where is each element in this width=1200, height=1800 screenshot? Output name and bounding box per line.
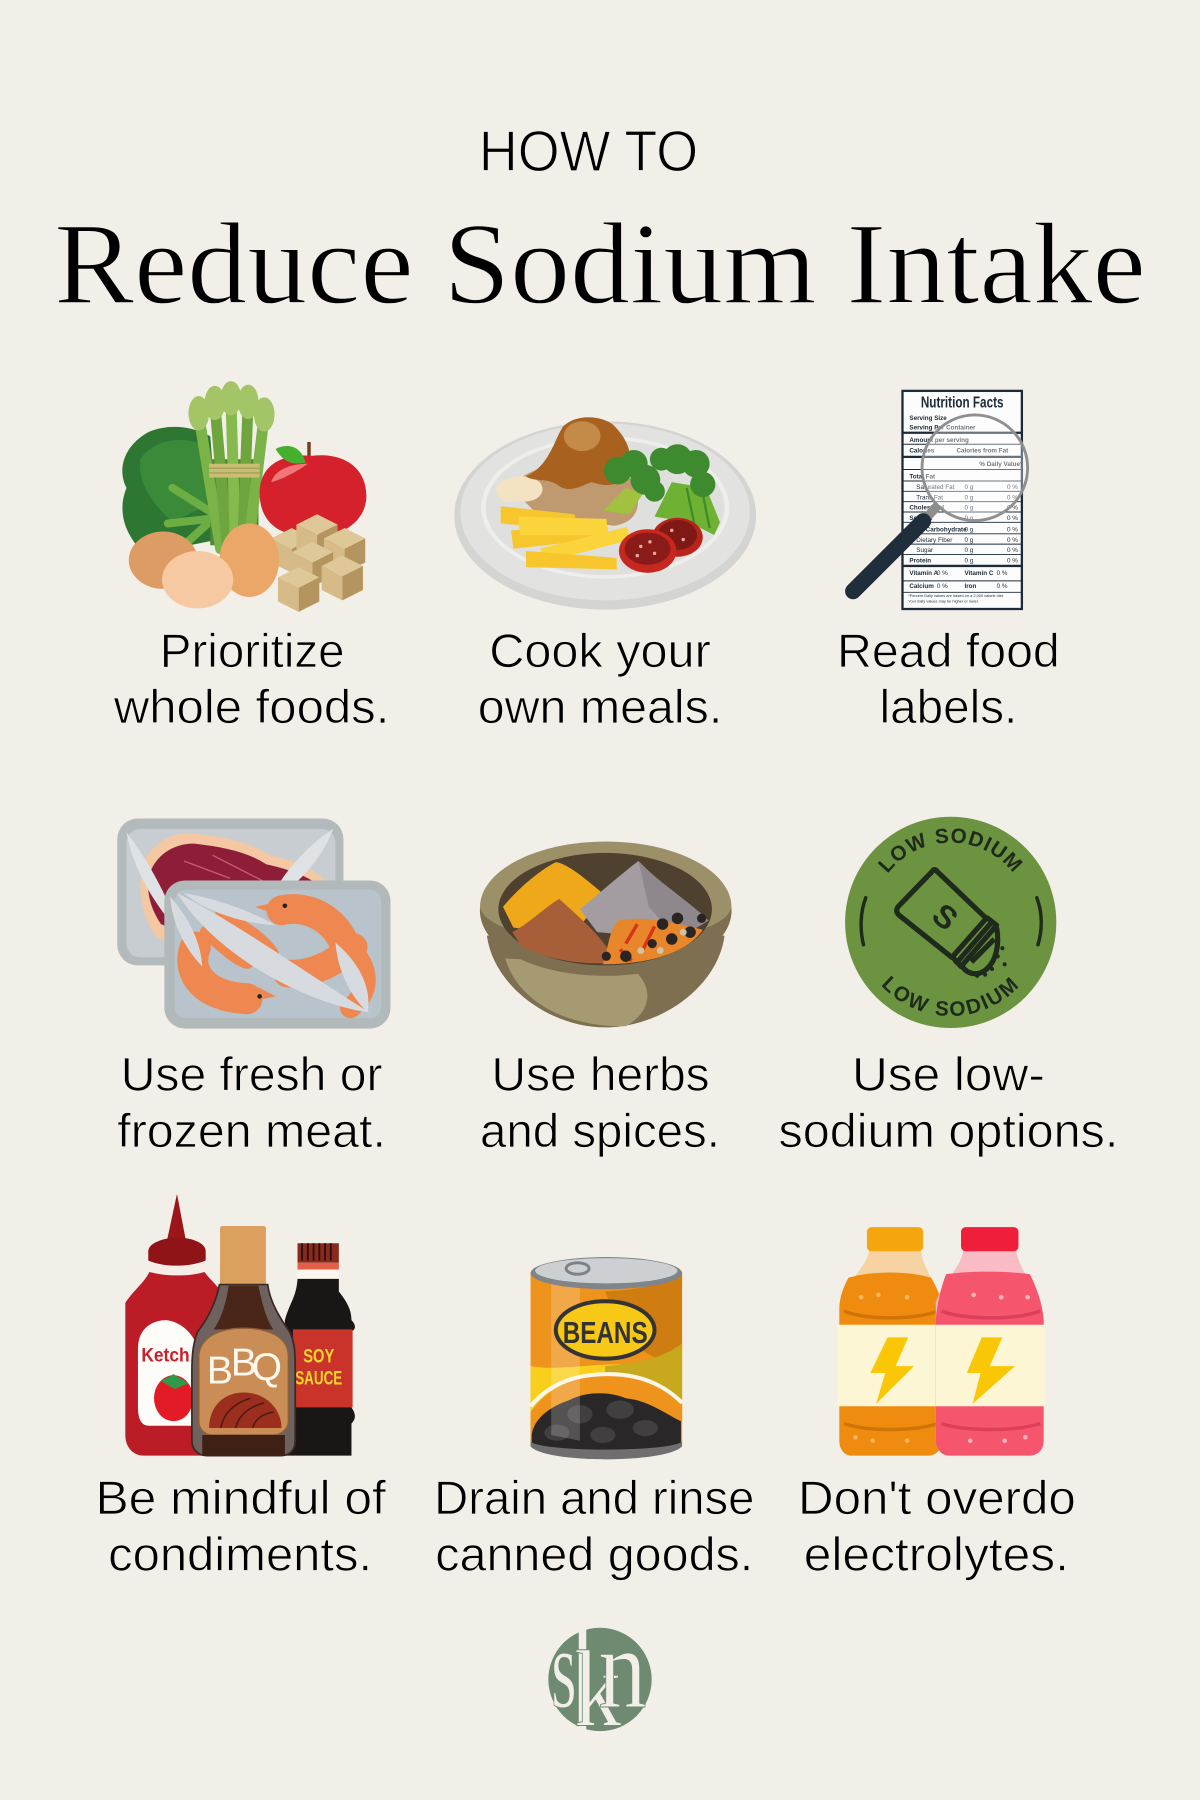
caption: use fresh or frozen meat — [117, 1048, 386, 1157]
icon: low sodium badge — [845, 816, 1056, 1028]
heading: reduce sodium intake: Reduce Sodium Intake — [54, 200, 1146, 329]
icon: nutrition facts label with magnifier: Calcium — [909, 583, 934, 590]
icon: nutrition facts label with magnifier: 0 % — [937, 583, 948, 590]
icon: can of beans: BEANS — [563, 1315, 648, 1350]
icon: nutrition facts label with magnifier: Total Fat — [909, 474, 936, 481]
icon: nutrition facts label with magnifier: 0 g — [964, 494, 974, 501]
icon: nutrition facts label with magnifier: Total Carbohydrate — [909, 527, 967, 534]
panel: drain and rinse canned goods — [434, 1257, 754, 1580]
icon: nutrition facts label with magnifier: 0 % — [1007, 547, 1018, 554]
icon: nutrition facts label with magnifier: Calories — [909, 447, 935, 454]
caption: drain and rinse canned goods: canned goods. — [435, 1527, 753, 1580]
caption: use low-sodium options — [779, 1048, 1118, 1157]
caption: use herbs and spices — [480, 1048, 720, 1157]
caption: use herbs and spices: and spices. — [480, 1104, 720, 1157]
logo: skn monogram: k — [574, 1628, 622, 1749]
caption: read food labels — [837, 624, 1060, 733]
caption: read food labels: labels. — [880, 680, 1017, 733]
caption: be mindful of condiments: condiments. — [108, 1527, 372, 1580]
caption: cook your own meals — [478, 624, 722, 733]
caption: prioritize whole foods: Prioritize — [160, 624, 345, 677]
right bottle — [936, 1227, 1045, 1456]
icon: nutrition facts label with magnifier: Protein — [909, 557, 931, 564]
heading: how to: HOW TO — [479, 120, 698, 184]
logo: skn monogram — [548, 1605, 652, 1749]
icon: condiment bottles: SOY — [303, 1346, 334, 1368]
icon: condiment bottles: SAUCE — [295, 1367, 342, 1389]
icon: nutrition facts label with magnifier: 0 % — [1007, 484, 1018, 491]
caption: be mindful of condiments — [95, 1471, 387, 1580]
icon: nutrition facts label with magnifier: Trans Fat — [916, 494, 943, 501]
icon: nutrition facts label with magnifier: 0 g — [964, 547, 974, 554]
icon: condiment bottles: B — [207, 1349, 233, 1392]
icon: nutrition facts label with magnifier: Amount per serving — [909, 437, 969, 444]
icon: electrolyte drink bottles — [837, 1227, 1045, 1456]
icon: nutrition facts label with magnifier: 0 % — [997, 570, 1008, 577]
caption: use low-sodium options: Use low- — [852, 1048, 1045, 1101]
icon: low sodium badge: LOW SODIUM — [878, 828, 1023, 873]
icon: nutrition facts label with magnifier: Vitamin A — [909, 570, 939, 577]
panel: use herbs and spices — [480, 841, 732, 1157]
icon: whole foods — [122, 381, 366, 612]
caption: cook your own meals: own meals. — [478, 680, 722, 733]
icon: nutrition facts label with magnifier: Sodium — [909, 515, 933, 522]
icon: condiment bottles — [125, 1194, 355, 1456]
icon: packaged meat and shrimp trays — [117, 818, 390, 1029]
icon: nutrition facts label with magnifier: 0 % — [1007, 505, 1018, 512]
icon: nutrition facts label with magnifier — [853, 391, 1028, 609]
logo: skn monogram: s — [551, 1605, 576, 1732]
caption: prioritize whole foods: whole foods. — [113, 680, 389, 733]
caption: cook your own meals: Cook your — [489, 624, 711, 677]
caption: don't overdo electrolytes — [798, 1471, 1076, 1580]
icon: low sodium badge: LOW SODIUM — [882, 976, 1018, 1016]
icon: nutrition facts label with magnifier: *Percent Daily values are based on a 2,000 calorie diet. — [908, 593, 1004, 598]
title block — [54, 120, 1146, 329]
icon: nutrition facts label with magnifier: 0 % — [937, 570, 948, 577]
icon: nutrition facts label with magnifier: 0 g — [964, 527, 974, 534]
caption: don't overdo electrolytes: electrolytes. — [804, 1527, 1069, 1580]
icon: nutrition facts label with magnifier: Your daily values may be higher or lower. — [908, 599, 979, 604]
panel: read food labels — [837, 391, 1060, 733]
icon: nutrition facts label with magnifier: Calories from Fat — [956, 447, 1009, 454]
icon: nutrition facts label with magnifier: Serving Size — [909, 415, 947, 422]
icon: nutrition facts label with magnifier: 0 g — [964, 484, 974, 491]
icon: condiment bottles: Ketch — [141, 1344, 190, 1366]
panel: use low-sodium options — [779, 816, 1118, 1157]
caption: use fresh or frozen meat: frozen meat. — [117, 1104, 386, 1157]
icon: low sodium badge: S — [925, 896, 965, 938]
left bottle — [837, 1227, 943, 1456]
panel: be mindful of condiments — [95, 1194, 387, 1580]
icon: bowl of spices — [480, 841, 732, 1027]
icon: nutrition facts label with magnifier: 0 g — [964, 515, 974, 522]
panel: cook your own meals — [454, 417, 756, 733]
logo: skn monogram: n — [598, 1605, 646, 1732]
panel: use fresh or frozen meat — [117, 818, 390, 1157]
icon: nutrition facts label with magnifier: Vitamin C — [964, 570, 994, 577]
icon: nutrition facts label with magnifier: 0 g — [964, 537, 974, 544]
icon: condiment bottles: B — [231, 1341, 257, 1384]
icon: nutrition facts label with magnifier: Nutrition Facts — [921, 394, 1004, 412]
caption: use low-sodium options: sodium options. — [779, 1104, 1118, 1157]
caption: prioritize whole foods — [113, 624, 389, 733]
caption: use fresh or frozen meat: Use fresh or — [121, 1048, 382, 1101]
icon: nutrition facts label with magnifier: % Daily Value* — [979, 461, 1023, 468]
icon: condiment bottles: Q — [252, 1346, 282, 1389]
caption: don't overdo electrolytes: Don't overdo — [798, 1471, 1076, 1524]
icon: nutrition facts label with magnifier: 0 g — [964, 505, 974, 512]
icon: nutrition facts label with magnifier: Saturated Fat — [916, 484, 955, 491]
icon: nutrition facts label with magnifier: 0 % — [1007, 515, 1018, 522]
icon: nutrition facts label with magnifier: Cholesterol — [909, 505, 944, 512]
icon: can of beans — [531, 1257, 682, 1459]
caption: read food labels: Read food — [837, 624, 1060, 677]
caption: drain and rinse canned goods — [434, 1471, 754, 1580]
icon: nutrition facts label with magnifier: Iron — [964, 583, 977, 590]
panel: don't overdo electrolytes — [798, 1227, 1076, 1580]
caption: be mindful of condiments: Be mindful of — [95, 1471, 387, 1524]
icon: nutrition facts label with magnifier: 0 g — [964, 557, 974, 564]
caption: use herbs and spices: Use herbs — [492, 1048, 710, 1101]
icon: nutrition facts label with magnifier: Serving Per Container — [909, 424, 976, 431]
caption: drain and rinse canned goods: Drain and rinse — [434, 1471, 754, 1524]
icon: nutrition facts label with magnifier: 0 % — [1007, 557, 1018, 564]
icon: nutrition facts label with magnifier: 0 % — [1007, 527, 1018, 534]
icon: plate of food — [454, 417, 756, 610]
icon: nutrition facts label with magnifier: 0 % — [997, 583, 1008, 590]
panel: prioritize whole foods — [113, 381, 389, 733]
icon: nutrition facts label with magnifier: Sugar — [916, 547, 933, 554]
icon: nutrition facts label with magnifier: 0 % — [1007, 537, 1018, 544]
icon: nutrition facts label with magnifier: 0 % — [1007, 494, 1018, 501]
icon: nutrition facts label with magnifier: Dietary Fiber — [916, 537, 952, 544]
